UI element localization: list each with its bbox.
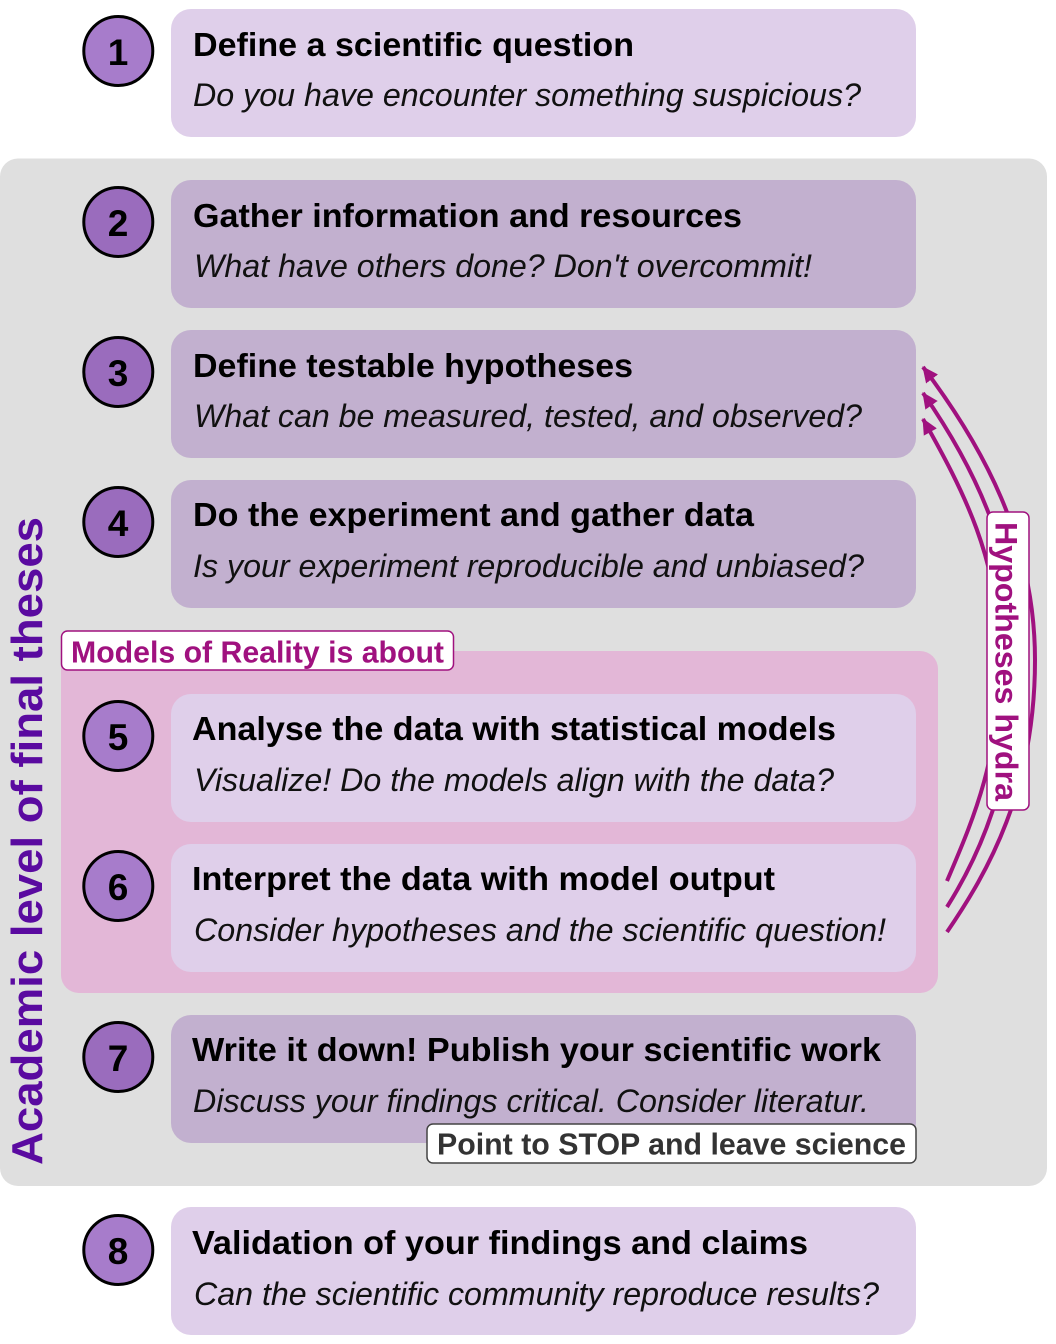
step 4 [84, 480, 916, 608]
step 4: 4 [108, 503, 129, 544]
step 3: 3 [108, 353, 128, 394]
heading: academic level of final theses: Academic level of final theses [3, 517, 52, 1165]
step 4: Do the experiment and gather data [193, 497, 754, 534]
step 2: Gather information and resources [193, 198, 742, 235]
step 7 [84, 1015, 916, 1143]
arrows: hypotheses hydra [923, 367, 1035, 932]
panel: academic level background [0, 158, 1047, 1186]
step 5: Visualize! Do the models align with the data? [194, 762, 834, 798]
step 8: Can the scientific community reproduce results? [194, 1276, 879, 1312]
step 5 [84, 694, 916, 822]
step 1: Do you have encounter something suspicious? [193, 77, 861, 113]
step 3: What can be measured, tested, and observed? [194, 398, 862, 434]
step 6: Interpret the data with model output [192, 861, 775, 898]
step 6 [84, 844, 916, 972]
step 1 [84, 9, 916, 137]
step 8 [84, 1207, 916, 1335]
step 1: Define a scientific question [193, 27, 634, 64]
step 6: Consider hypotheses and the scientific question! [194, 912, 886, 948]
step 6: 6 [108, 867, 128, 908]
step 7: Write it down! Publish your scientific work [192, 1032, 881, 1069]
label: models of reality: Models of Reality is about [71, 634, 444, 670]
step 7: 7 [108, 1038, 128, 1079]
label: hypotheses hydra: Hypotheses hydra [988, 522, 1024, 801]
step 5: Analyse the data with statistical models [192, 711, 836, 748]
step 7: Discuss your findings critical. Consider literatur. [193, 1083, 869, 1119]
step 2: What have others done? Don't overcommit! [194, 248, 812, 284]
step 2 [84, 180, 916, 308]
step 8: 8 [108, 1231, 128, 1272]
step 3 [84, 330, 916, 458]
label: point to stop: Point to STOP and leave science [437, 1126, 906, 1162]
step 8: Validation of your findings and claims [192, 1225, 808, 1262]
step 5: 5 [108, 717, 128, 758]
step 3: Define testable hypotheses [193, 348, 633, 385]
step 2: 2 [108, 203, 128, 244]
panel: models of reality [61, 651, 938, 993]
step 1: 1 [108, 32, 128, 73]
step 4: Is your experiment reproducible and unbiased? [193, 548, 864, 584]
